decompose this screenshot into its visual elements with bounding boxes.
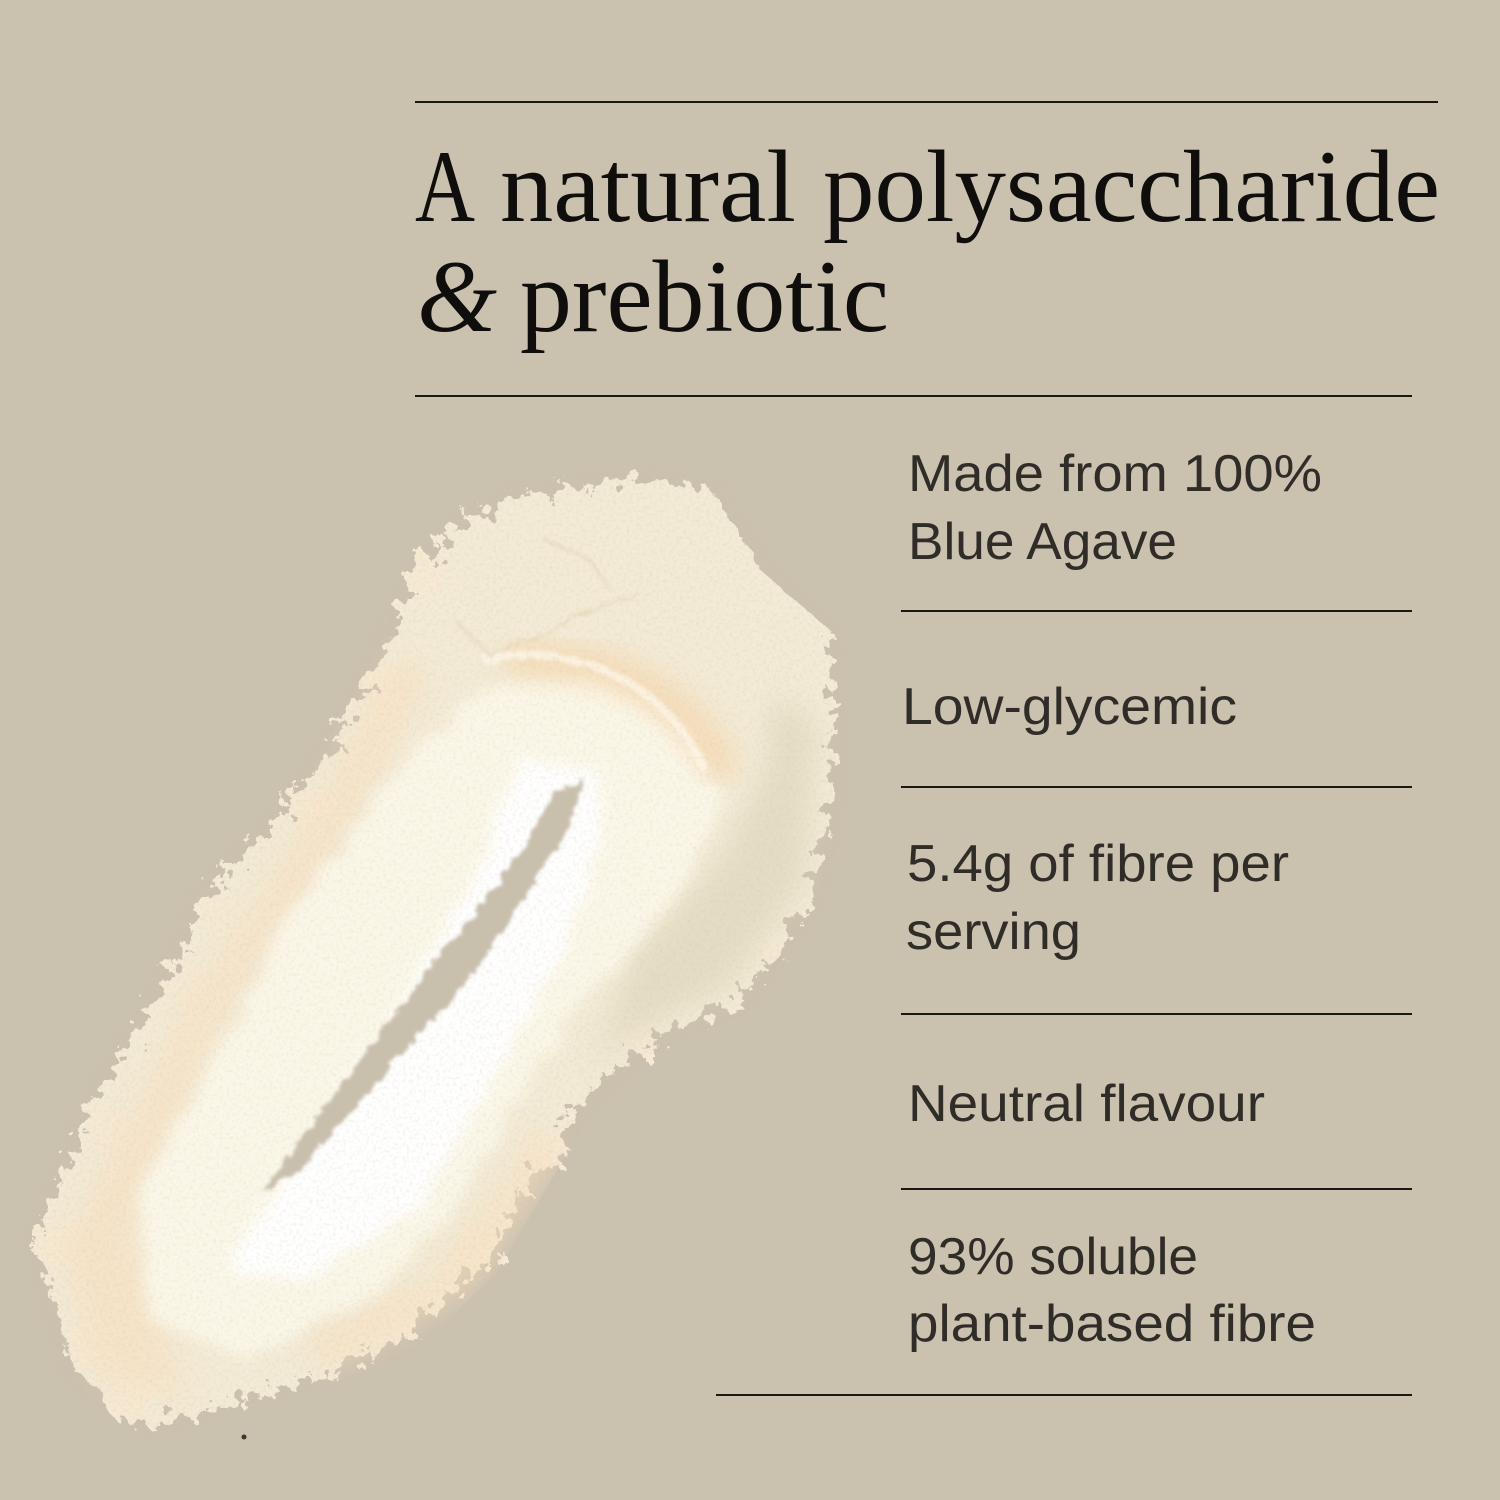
powder crescent ridge [485,655,705,770]
powder slit [262,780,585,1192]
feature: low-glycemic: Low-glycemic [902,678,1237,736]
title: A [415,130,475,244]
stray speck [242,1434,246,1440]
feature: blue agave: Made from 100% [908,445,1322,503]
powder warm edge tint [60,650,815,1400]
feature: neutral flavour: Neutral flavour [908,1075,1265,1133]
feature: fibre per serving: serving [906,903,1081,961]
title: polysaccharide [823,130,1440,244]
feature: soluble fibre: 93% soluble [908,1228,1198,1286]
powder smooth pressed centre [140,670,720,1360]
title: prebiotic [520,240,889,354]
powder grain texture [36,480,835,1429]
feature: fibre per serving [906,835,1289,961]
powder edge clumps [34,553,784,1424]
powder peach crescent [520,660,720,765]
powder bright white streak [230,760,600,1280]
powder smear illustration [10,450,860,1450]
feature: soluble fibre [908,1228,1316,1353]
powder grey-green right shading [606,707,816,1044]
feature: blue agave: Blue Agave [908,513,1177,571]
title [415,130,1440,354]
feature: soluble fibre: plant-based fibre [908,1295,1316,1353]
powder outer mass [35,478,832,1428]
title: natural [500,130,796,244]
feature: blue agave [908,445,1322,571]
title bottom rule [415,395,1412,397]
top rule [415,101,1438,103]
feature: fibre per serving: 5.4g of fibre per [907,835,1289,893]
feature list [716,445,1412,1396]
title: & [417,240,497,354]
powder top cracks [455,540,640,655]
